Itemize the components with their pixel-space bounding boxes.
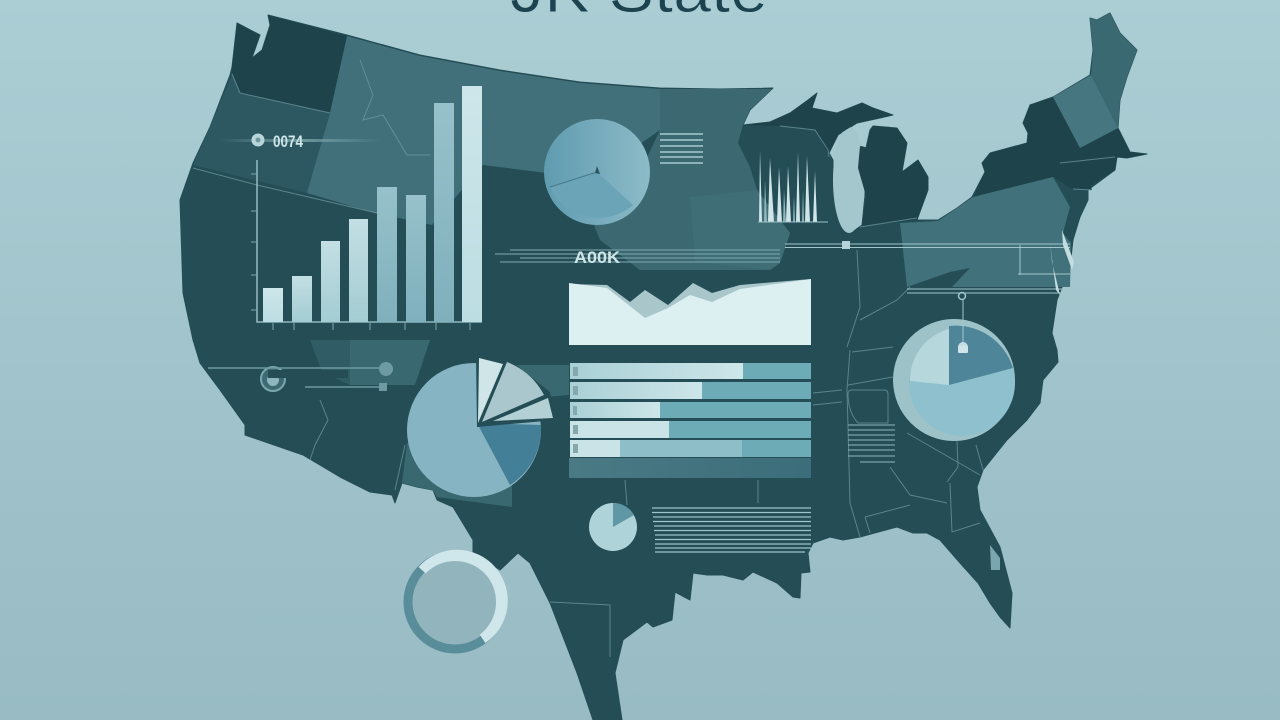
Chesapeake inlet	[1050, 230, 1074, 295]
connector node	[842, 241, 850, 249]
legend callout bottom left	[208, 362, 393, 391]
region behind big pie	[490, 365, 569, 400]
states: Ohio and Pennsylvania	[900, 177, 1071, 287]
row markers	[573, 367, 578, 453]
east pie chart	[893, 292, 1015, 441]
pie legend lines	[660, 134, 703, 163]
lake Michigan	[833, 127, 865, 233]
small pie chart	[589, 503, 637, 551]
state: Maine	[1090, 13, 1137, 128]
state: Washington	[232, 15, 347, 113]
state: New York	[973, 97, 1092, 197]
southwest region	[350, 340, 430, 385]
label above area chart	[495, 248, 780, 267]
donut chart	[408, 555, 502, 649]
state border lines	[193, 60, 1115, 657]
bar chart	[251, 86, 482, 330]
light slice	[910, 329, 949, 385]
southeast line block	[848, 425, 895, 462]
main slice	[407, 363, 541, 497]
axis ticks	[251, 174, 470, 330]
narrow wedge	[493, 398, 553, 421]
state: Oregon	[193, 74, 330, 193]
state: Vermont and New Hampshire	[1053, 75, 1118, 148]
map outline	[180, 13, 1147, 720]
outer ring	[893, 319, 1015, 441]
bars	[263, 288, 283, 322]
lock marker	[958, 342, 968, 353]
horizontal line block	[652, 508, 811, 552]
state: Iowa	[690, 190, 790, 270]
chart label: top left	[220, 132, 380, 151]
connector lines right	[785, 241, 1070, 293]
map of the United States	[180, 13, 1147, 720]
top pie chart	[544, 119, 650, 225]
row 3	[570, 402, 811, 418]
blue slice	[477, 423, 541, 485]
chart label: top left: 0074	[273, 132, 303, 151]
white wedge	[478, 358, 503, 423]
northern plains states	[307, 36, 660, 225]
state: Kentucky wedge	[907, 268, 970, 287]
state: Michigan	[858, 126, 928, 226]
large pie chart	[407, 357, 556, 497]
area chart	[569, 279, 811, 345]
label above area chart: A00K	[574, 248, 621, 267]
state: Minnesota and Dakotas	[590, 89, 790, 270]
axes	[257, 160, 482, 322]
blue slice	[949, 326, 1013, 385]
row 2	[570, 382, 811, 399]
grey wedge	[482, 362, 544, 422]
states: Massachusetts and Connecticut	[1080, 128, 1147, 188]
exploded wedge background	[476, 357, 556, 427]
row 4	[570, 421, 811, 438]
connector	[962, 300, 964, 342]
stacked bar table	[569, 363, 811, 478]
row 1	[570, 363, 811, 379]
state: Wisconsin and upper peninsula	[743, 93, 893, 157]
state: west Texas	[402, 440, 512, 507]
state: Utah	[310, 340, 350, 385]
table footer	[569, 458, 811, 478]
row 5	[570, 440, 811, 457]
Florida lake	[990, 545, 1000, 570]
spark bar chart	[758, 150, 828, 222]
